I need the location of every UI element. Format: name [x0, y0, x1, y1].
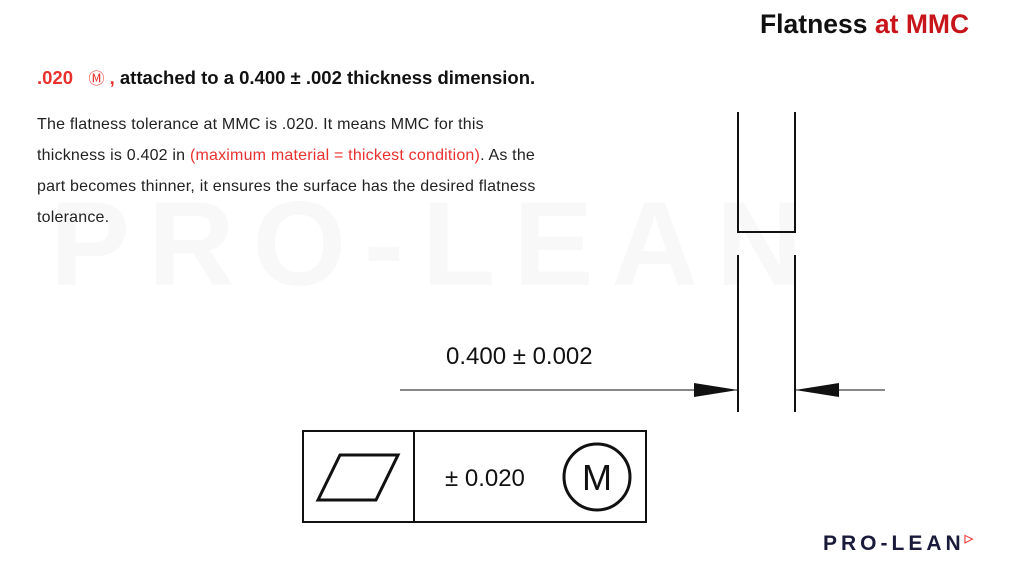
- watermark: PRO-LEAN: [50, 177, 821, 311]
- drawing: M: [582, 457, 612, 498]
- logo: PRO-LEAN▷: [823, 532, 977, 555]
- body text: The flatness tolerance at MMC is .020. It means MMC for this thickness is 0.402 in (maximum material = thickest condition). As the part becomes thinner, it ensures the surface has the desired flatness tolerance.: [37, 116, 536, 226]
- drawing: 0.400 ± 0.002: [446, 343, 593, 370]
- drawing: ± 0.020: [445, 465, 525, 492]
- subheading: .020 Ⓜ , attached to a 0.400 ± .002 thickness dimension.: [37, 67, 535, 88]
- title: Flatness at MMC: [760, 9, 969, 39]
